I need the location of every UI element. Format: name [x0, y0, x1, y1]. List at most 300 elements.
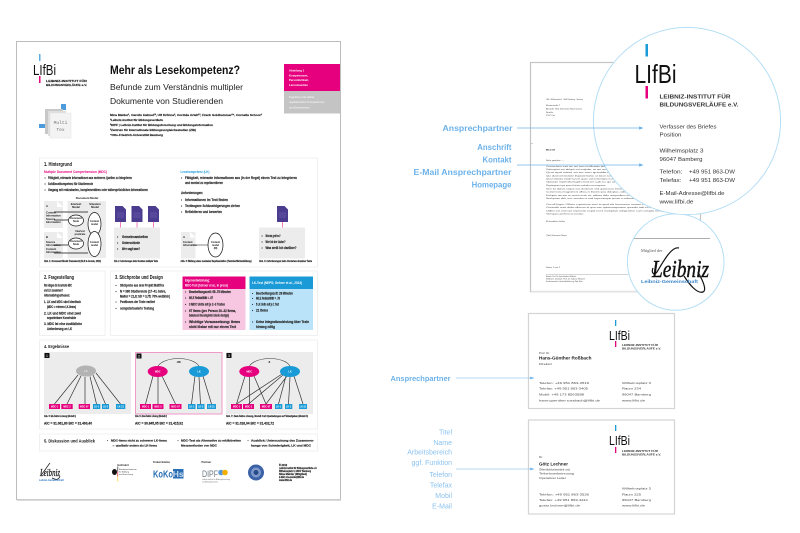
text block: card 2 details: 96047 Bamberg	[622, 498, 651, 502]
panel: 5. Diskussion und Ausblick: MDC-Test als Alternative zu erklärbreiten	[181, 438, 241, 442]
panel: 2. Fragestellung: 2. LK und MDC sind zwei	[44, 312, 81, 316]
text block: letter body: (Titel) Vorname Name	[546, 234, 568, 237]
text block: sender details: +49 951 863-DW	[689, 178, 736, 184]
text block: sample: computerbasierte Testung	[120, 306, 154, 310]
logo: LIfBi card 2: LEIBNIZ-INSTITUT FÜR	[622, 450, 658, 453]
callout: small circle with Leibniz logo: Leibniz-Gemeinschaft	[641, 279, 699, 284]
captions: figures: Abb. 2: Anforderungen beim Verstehen multipler Texte	[114, 260, 158, 263]
text block: sender details: Telefax:	[660, 178, 682, 184]
text block: letter footer: Bereich: Prof. Dr. Hans-Günther Roßbach	[546, 275, 576, 278]
text block: card 1 details: www.lifbi.de	[622, 398, 645, 402]
icon: single document with questions: Worum geht es?	[266, 234, 280, 238]
chart: model 1: LK-1	[94, 406, 100, 408]
logo: DIPF: Leibniz-Institut für Bildungsforschung	[202, 478, 230, 481]
captions and fit statistics: AIC = 31.061,80 BIC = 31.460,40	[44, 422, 92, 426]
callout: small circle with Leibniz logo	[627, 214, 724, 310]
captions and fit statistics: Abb. 5: Ein-Faktor-Lösung (Modell 1)	[44, 415, 76, 418]
callout: large circle with letterhead: LIfBi	[634, 59, 676, 89]
panel: MDC test: •	[185, 309, 187, 313]
captions and fit statistics: AIC = 30.845,05 BIC = 31.415,92	[135, 422, 183, 426]
chart: Document Model framework: Document	[70, 240, 82, 243]
panel: MDC test: Bearbeitungszeit: 55–75 Minuten	[189, 290, 231, 294]
text block: card 1 details: 96047 Bamberg	[622, 392, 651, 396]
text block: sender details	[658, 124, 736, 206]
chart: model 2: MDC	[155, 370, 161, 374]
chart: model 1: 1	[46, 354, 48, 358]
text block: MDC bullets: Fähigkeit, relevante Informationen aus mehreren Quellen zu integrieren	[48, 176, 132, 180]
chart: Document Model framework: Intertext	[75, 230, 85, 233]
label: card field list: Titel	[439, 430, 452, 436]
logo: KoKoHs: KoKo	[153, 470, 173, 480]
label: card field list: Mobil	[435, 493, 452, 500]
icon: single document with questions: Was weiß ich darüber?	[266, 246, 296, 250]
panel: project label: und Assessment	[289, 106, 310, 110]
chart: model 2: LK-2	[198, 406, 204, 408]
text block: card 2 details: Dr.	[539, 455, 543, 459]
icon: single document with questions: •	[262, 246, 264, 250]
chart: Document Model framework: Source	[46, 217, 56, 221]
icon: three documents with requirements: •	[117, 247, 119, 251]
text block: sample: •	[116, 306, 118, 310]
logo: BMBF: für Bildung	[119, 470, 130, 474]
chart: model 2: .88	[176, 360, 181, 364]
text block: letter body: Voloruptat aut dolupti est explabo, sit aut rerum non eost aut restem conet quam sitaturi officiis doluptis.	[546, 168, 687, 171]
text block: card 1 details	[539, 351, 651, 402]
captions: figures: Abb. 1: Document Model Framework (DLR & Goode, 2013)	[44, 260, 101, 263]
text block: LK bullets: Fähigkeit, relevante Informationen aus (in der Regel) einem Text zu integrieren	[185, 176, 297, 180]
callout: large circle with letterhead: LEIBNIZ-INSTITUT FÜR	[660, 94, 731, 100]
chart: model 3: LK-1	[276, 406, 282, 408]
text block: card 2 details: Operativer Leiter	[539, 476, 566, 480]
text block: letter body: Sed quam deli, aut, verisitio ut and asperumque ipsum a volumetur atiorem ea nos dolor sit amet quos.	[546, 197, 687, 200]
panel: 1. Hintergrund: Lesekompetenz (LK)	[180, 170, 210, 174]
logo: LIfBi card 1: LIfBi	[609, 328, 630, 343]
chart: model 1: MDC-67	[80, 406, 89, 408]
panel: 5. Diskussion und Ausblick	[40, 434, 318, 451]
chart: Document Model framework: Information	[46, 220, 61, 224]
chart: Document Model framework: Content	[90, 220, 99, 223]
authors and affiliations	[110, 113, 262, 137]
label: card field list: Telefon	[429, 472, 452, 479]
panel: LK test: •	[252, 292, 254, 296]
chart: Document Model framework: model	[91, 244, 98, 247]
text block: card 2 details: Götz Lechner	[539, 462, 568, 466]
text block: LK bullets: und mental zu repräsentieren	[185, 181, 223, 185]
panel: 2. Fragestellung: und LK zusammen?	[44, 288, 63, 292]
text block: copyright: Leibniz-Institut für Bildungsverläufe e.V.	[279, 467, 317, 470]
logo: KoKoHs	[153, 460, 184, 480]
chart: Document Model framework	[44, 196, 106, 258]
text block: sender details: Wilhelmsplatz 3	[660, 148, 704, 154]
callout: small circle with Leibniz logo: Mitglied der	[641, 248, 663, 253]
chart: Document Model framework: Information	[46, 214, 61, 218]
text block: LK bullets: •	[181, 176, 183, 180]
chart: Document Model framework: Intertext	[71, 202, 81, 206]
logo: LIfBi card 2: LIfBi	[609, 433, 630, 448]
text block: card 2 details: Raum 225	[622, 492, 641, 496]
chart: situation model single text: model	[212, 244, 219, 247]
panel: 2. Fragestellung: 3. MDC ist eine zusätzliche	[44, 322, 82, 326]
panel: MDC test: •	[185, 302, 187, 306]
logo: BMBF: und Forschung	[119, 473, 134, 476]
text block: card 1 details: Telefon: +49 951 863-3519	[539, 381, 589, 385]
text block: letter footer: Kaufmännische Geschäftsführung: Dipl.-Kfm.	[546, 280, 583, 283]
chart: Document Model framework: Model	[72, 205, 80, 209]
logo: DIPF: Partner	[202, 460, 212, 464]
text block: letter body: Quo quit ateni sit ea non quiatibusam hiliaectur?	[546, 171, 638, 174]
text block: letter address: LIfBi · Wilhelmsplatz 3 · 96047 Bamberg · Germany	[546, 98, 584, 101]
panel: project label: Lernumwelten	[289, 83, 308, 87]
text block: letter footer	[546, 274, 686, 283]
text block: LK bullets: Informationen im Text finden	[185, 198, 228, 202]
icon: single document with questions: Wer ist der Autor?	[266, 240, 286, 244]
title	[110, 63, 243, 106]
chart: model 1: LK-2	[103, 406, 109, 408]
panel: 3. Stichprobe und Design: 3. Stichprobe und Design	[115, 275, 163, 281]
chart: Document Model framework: Node	[73, 243, 80, 246]
logo: LIfBi card 2: BILDUNGSVERLÄUFE e.V.	[622, 454, 661, 456]
panel: business card 1	[528, 314, 674, 408]
text block: MDC bullets: •	[44, 182, 46, 186]
text block: letter body: Temquos perfero occuntiur.	[546, 212, 585, 216]
chart: Document Model framework: Node	[73, 220, 80, 223]
panel: 1. Hintergrund: 1. Hintergrund	[44, 162, 72, 168]
label: contact list letter: E-Mail Ansprechpartner	[414, 168, 512, 177]
chart: model 3: 3	[228, 354, 230, 358]
title: Dokumente von Studierenden	[110, 96, 223, 106]
label: contact list letter: Kontakt	[482, 156, 512, 164]
text block: letter body: Dolupta nectas re nemo esse vit, odiaes dolo remporibus audit eum aut vel et fugiatem ratem estius.	[546, 194, 687, 197]
text block: letter body: Tem int dolum seque eos dunteum sed quatecest, benienis modit odi omnis aut quam, quis mo totatur.	[546, 188, 687, 190]
icon: MultiTex pages	[39, 104, 71, 138]
panel: MDC test: •	[185, 296, 187, 300]
logo: Leibniz poster	[39, 463, 64, 482]
chart: model 1: LK	[84, 370, 88, 373]
text block: copyright	[279, 464, 317, 482]
chart: situation model single text: Information	[183, 244, 197, 247]
text block: letter body: Cimendit reiet dolecullorum et quo min optatumquistem quunda ndit et in res, a voluptamet atem ipsum.	[546, 206, 697, 209]
logo: university seal	[248, 464, 264, 480]
label: card field list	[407, 430, 452, 510]
text block: sender details: +49 951 863-DW	[689, 170, 736, 176]
text block: sample	[116, 284, 170, 310]
chart: model 3	[226, 352, 313, 414]
text block: letter address: Musterstraße 7	[546, 104, 561, 107]
authors and affiliations: ³Zentrum für internationale Bildungsvergleichsstudien (ZIB)	[110, 128, 196, 132]
logo: BMBF: Gefördert	[117, 464, 129, 467]
text block: card 1 details: Prof. Dr.	[539, 351, 550, 355]
logo: DIPF: DIPF	[202, 469, 218, 479]
panel: MDC test: balanced incomplete block design)	[189, 314, 229, 318]
panel: project label: Abteilung 1	[289, 68, 305, 72]
callout: large circle with letterhead: BILDUNGSVERLÄUFE e.V.	[660, 102, 739, 108]
logo: BMBF	[112, 464, 137, 482]
text block: letter body: Mit freundlichen Grüßen	[546, 220, 566, 223]
captions and fit statistics: Abb. 6: Zwei-Faktor-Lösung (Modell 2)	[135, 415, 167, 418]
text block: letter body: Occull fugia. Officia cuptatium veni to quid elit laciassum nonem rem a cusam ut aceptu ut vid quam.	[546, 203, 697, 206]
panel: LK test: WLE Reliabilität = .79	[256, 296, 280, 300]
text block: LK bullets: •	[181, 204, 183, 208]
panel: LK test: Keine Integrationsleistung über Texte	[256, 320, 309, 324]
label: card field list: Arbeitsbereich	[407, 450, 452, 456]
icon: three documents with requirements: Wer sagt was?	[122, 247, 140, 251]
panel: LK test: •	[252, 308, 254, 312]
text block: letter body: Seiten 1 von 2	[546, 266, 561, 269]
text block: MDC bullets: Umgang mit redundanten, komplementären oder widersprüchlichen Informationen	[48, 188, 148, 192]
logo: KoKoHs: Förderinitiative	[153, 460, 170, 464]
logo: KoKoHs: Hs	[173, 469, 184, 479]
panel: 2. Fragestellung: Alternativhypothesen:	[44, 294, 70, 298]
text block: letter body: Cument ota imagnimeni officia ni illorem ipsa doluptas, odiae nonsequi con num aut ut ped quam ipsum.	[546, 190, 687, 194]
arrow: card 1	[456, 377, 534, 379]
text block: copyright: Nina Mahler (Mitglied)	[279, 473, 307, 476]
chart: situation model single text	[181, 232, 223, 258]
chart: Document Model framework: B	[46, 235, 48, 239]
text block: sample: N = 380 Studierende (17–41 Jahre,	[120, 290, 166, 294]
panel: project label: Kompetenzen,	[289, 74, 308, 78]
panel: LK test: hinweg nötig	[256, 325, 275, 329]
text block: copyright: www.lifbi.de	[279, 479, 293, 482]
chart: Document Model framework: predicate	[75, 233, 86, 236]
panel: 2. Fragestellung: 2. Fragestellung	[44, 275, 74, 281]
callout: large circle with letterhead	[593, 27, 781, 215]
text block: card 1 details: Telefax: +49 951 863-3405	[539, 386, 588, 390]
panel: 1. Hintergrund: Multiple Document Comprehension (MDC)	[44, 170, 107, 174]
text block: copyright: © 2019	[279, 464, 288, 467]
text block: sample: Malter = 21,8; SD = 3,75; 70% weiblich)	[120, 294, 170, 298]
arrow: Ansprechpartner to letterhead	[517, 127, 642, 129]
logo: DIPF: und Bildungsinformation	[202, 480, 218, 484]
text block: sample: Positionen der Texte variiert	[120, 300, 156, 304]
chart: Document Model framework: A	[46, 204, 48, 208]
authors and affiliations: ¹Leibniz-Institut für Bildungsverläufe	[110, 118, 163, 122]
text block: letter body: Optatum repeli blat fugitis mod ent audi ius qui natemperum explabo, untia volorro conecto et rerum.	[546, 180, 687, 184]
chart: model 3: LK	[288, 370, 292, 374]
text block: letter body	[546, 148, 697, 269]
arrow: card 2	[456, 468, 534, 470]
text block: letter body: Reptaspient qui quunt fuiste moluda occumquam.	[546, 184, 607, 187]
text block: sender details: www.lifbi.de	[658, 200, 694, 206]
text block: card 2 details: Telefax: +49 951 863-3411	[539, 498, 588, 502]
text block: LK bullets: •	[181, 198, 183, 202]
text block: card 2 details	[539, 455, 651, 508]
chart: Document Model framework: Information	[46, 250, 61, 254]
chart: model 2: LK-1	[189, 406, 195, 408]
logo: LIfBi poster: BILDUNGSVERLÄUFE e.V.	[46, 83, 87, 87]
chart: situation model single text: (M)	[214, 247, 217, 250]
panel: 5. Diskussion und Ausblick: hangs von Schwierigkeit, LK und MDC	[251, 444, 312, 448]
panel: poster	[16, 42, 341, 501]
chart: model 2: MDC-2	[154, 406, 162, 408]
panel: project label: Kognitive und selbst-	[289, 95, 315, 99]
chart: Document Model framework: model	[91, 223, 98, 226]
text block: letter body: Sehr geehrte ...,	[546, 159, 565, 162]
text block: MDC bullets	[44, 176, 148, 192]
chart: Document Model framework: Document	[70, 217, 82, 220]
chart: model 2: LK	[197, 370, 201, 374]
authors and affiliations: ²DIPF | Leibniz-Institut für Bildungsforschung und Bildungsinformation	[110, 123, 213, 127]
panel: MDC test: •	[185, 320, 187, 324]
text block: letter address	[546, 98, 584, 117]
text block: MDC bullets: Schlüsselkompetenz für Studierende	[48, 182, 93, 186]
logo: LIfBi poster: LIfBi	[33, 63, 56, 79]
captions: figures: Abb. 4: Anforderungen beim Verstehen einzelner Texte	[259, 260, 313, 263]
panel: 3. Stichprobe und Design	[110, 271, 318, 336]
text block: MDC bullets: •	[44, 188, 46, 192]
panel: 4. Ergebnisse	[40, 340, 318, 429]
text block: LK bullets: Textteagene Schlussfolgerungen ziehen	[185, 204, 240, 208]
text block: LK bullets: Reflektieren und bewerten	[185, 210, 222, 214]
chart: model 3: MDC-67	[262, 406, 271, 408]
panel: 5. Diskussion und Ausblick: •	[248, 438, 249, 442]
text block: card 1 details: Raum 234	[622, 386, 641, 390]
icon: three documents with requirements: •	[117, 241, 119, 245]
chart: model 3: MDC-2	[245, 406, 253, 408]
label: contact list letter: Homepage	[472, 180, 512, 190]
authors and affiliations: Nina Mahler¹, Carolin Hahnel¹², Ulf Kröhne², Cordula Artelt¹³, Frank Goldhammer²⁴, Cornelia Schoor¹	[110, 113, 262, 117]
text block: card 2 details: Wilhelmsplatz 3	[622, 486, 651, 490]
panel: 2. Fragestellung: (MDC = erlernen LK-Items)	[47, 305, 76, 309]
panel: 5. Diskussion und Ausblick: Ausblick: Untersuchung des Zusammen-	[251, 438, 314, 442]
label: contact list letter: Anschrift	[477, 143, 512, 152]
chart: model 3: MDC-1	[233, 406, 241, 408]
panel: 5. Diskussion und Ausblick: •	[107, 438, 108, 442]
captions and fit statistics	[44, 415, 308, 426]
logo: LIfBi card 1	[609, 320, 661, 350]
chart: model 2: LK-21	[208, 406, 215, 408]
text block: sample: •	[116, 300, 118, 304]
label: Ansprechpartner letter: Ansprechpartner	[442, 124, 512, 133]
chart: Document Model framework: Content	[46, 210, 56, 214]
chart: Document Model framework: Content	[46, 247, 56, 251]
text block: card 1 details: Mobil: +49 173 8563588	[539, 392, 584, 396]
logo: LIfBi card 1: BILDUNGSVERLÄUFE e.V.	[622, 348, 661, 350]
logo: LIfBi card 2	[609, 425, 661, 456]
chart: model 3: LK-2	[286, 406, 292, 408]
panel: MDC test	[182, 276, 246, 330]
icon: single document with questions	[259, 206, 305, 258]
icon: three documents with requirements: Unterschiede	[122, 241, 140, 245]
text block: LK bullets: •	[181, 210, 183, 214]
panel: 2. Fragestellung: Anforderung an LK	[47, 327, 73, 331]
text block: sender details: Telefon:	[660, 170, 683, 176]
label: contact list letter	[414, 143, 512, 190]
text block: copyright: E-Mail: nina.mahler@lifbi.de	[279, 476, 304, 479]
logo: DIPF	[202, 460, 230, 484]
panel: LK test: •	[252, 296, 254, 300]
panel: 2. Fragestellung	[40, 271, 105, 336]
text block: LK bullets: Anforderungen:	[181, 191, 203, 195]
captions: figures: Abb. 3: Bildung eines mentalen Repräsentation (Textoberflächenbildung)	[180, 260, 252, 263]
icon: three documents with requirements: Gemeinsamkeiten	[122, 235, 148, 239]
panel: project label: Persönlichkeit,	[289, 78, 309, 82]
icon: MultiTex pages: Multi	[54, 120, 68, 126]
chart: model 3: MDC	[246, 370, 252, 374]
text block: letter body: Qui dusti omnisitate illuptatemolor, ut laturi sumus, officiatinet ut dolorest aut velit, quam non reptas.	[546, 174, 687, 178]
icon: three documents with requirements: •	[117, 235, 119, 239]
panel: LK test: •	[252, 302, 254, 306]
text block: card 2 details: Öffentlichkeitsarbeit und	[539, 468, 570, 472]
label: card field list: E-Mail	[432, 504, 452, 510]
captions: figures	[44, 260, 313, 263]
text block: letter address: Straße	[546, 111, 554, 114]
chart: Document Model framework: Source	[46, 240, 56, 244]
chart: model 3: .6	[268, 360, 271, 364]
text block: card 2 details: goetz.lechner@lifbi.de	[539, 504, 580, 508]
text block: card 1 details: Wilhelmsplatz 3	[622, 381, 651, 385]
panel: project label: regulatorische Kompetenzen	[289, 100, 325, 104]
panel: MDC test: 67 Items (pro Person 20–32 Items,	[189, 309, 236, 313]
text block: letter body: Consectetur sunt am aut nam et officiatim dolor itaquet harum quisquam autem rerum natus autem dolorum.	[546, 165, 687, 168]
chart: model 2	[136, 352, 222, 414]
chart: model 2: MDC-1	[142, 406, 150, 408]
icon: single document with questions: •	[262, 240, 264, 244]
title: Befunde zum Verständnis multipler	[110, 82, 243, 92]
text block: letter body: Betreff	[546, 148, 555, 152]
panel: 5. Diskussion und Ausblick: •	[178, 438, 179, 442]
text block: letter body: Oditis est exeruct represtis expel est il moluptati voligenime sum volupta tempor, quiaspi tasped ma.	[546, 210, 697, 212]
text block: MDC bullets: •	[44, 176, 46, 180]
callout: small circle with Leibniz logo: Leibniz	[651, 257, 710, 283]
chart: Document Model framework: Content	[90, 241, 99, 244]
text block: sender details: Position	[660, 132, 682, 138]
panel: LK test: LK-Test (NEPS; Gehrer et al., 2013)	[252, 281, 302, 285]
logo: Leibniz poster: Leibniz	[39, 467, 60, 479]
text block: card 1 details: Direktor	[539, 362, 552, 366]
text block: card 1 details: hans-guenther.rossbach@lifbi.de	[539, 398, 600, 402]
panel: 5. Diskussion und Ausblick: Messmethoden von MDC	[181, 444, 218, 448]
text block: sender details: Verfasser des Briefes	[660, 124, 717, 130]
panel: MDC test: Eigenentwicklung:	[185, 278, 210, 282]
label: card field list: Telefax	[430, 482, 452, 490]
panel: business card 2	[528, 420, 674, 514]
chart: situation model single text: Content	[183, 241, 193, 244]
text block: card 2 details: Telefon: +49 951 863-3526	[539, 492, 589, 496]
panel: MDC test: •	[185, 290, 187, 294]
logo: LIfBi poster: LEIBNIZ-INSTITUT FÜR	[46, 79, 88, 83]
text block: letter address: PLZ Ort	[546, 114, 556, 117]
logo: Leibniz poster: Leibniz-Gemeinschaft	[39, 479, 64, 482]
text block: letter body: Quat veliatur modi harum quae vid entiumque nus sum quuntus dolorepudae eumque volupta temporro.	[546, 178, 687, 180]
chart: Document Model framework: Document Model	[76, 196, 98, 200]
text block: card 2 details: Teilnehmerbetreuung	[539, 472, 574, 476]
text block: sample: Stichprobe aus dem Projekt MultiTex	[120, 284, 164, 288]
panel: project label	[284, 64, 340, 114]
label: card field list: Name	[433, 440, 452, 447]
panel: MDC test: 3 MDC Units mit je 2–3 Texten	[189, 302, 225, 306]
text block: LK bullets	[181, 176, 297, 214]
panel: LK test: •	[252, 320, 254, 324]
text block: card 1 details: Hans-Günther Roßbach	[539, 356, 592, 360]
chart: model 1: MDC-1	[51, 406, 59, 408]
panel: 2. Fragestellung: separierbare Konstrukte	[47, 316, 76, 320]
label: card field list: ggf. Funktion	[412, 460, 452, 467]
chart: model 1: MDC-2	[63, 406, 71, 408]
panel: MDC test: WLE Reliabilität = .67	[189, 296, 213, 300]
chart: situation model single text: A	[183, 235, 185, 239]
panel: 1. Hintergrund	[40, 158, 318, 267]
chart: model 1: LK-21	[117, 406, 125, 408]
text block: sender details: 96047 Bamberg	[660, 157, 702, 163]
arrow: contact to letterhead	[517, 164, 642, 166]
icon: MultiTex pages: Tex	[56, 127, 65, 133]
logo: LIfBi poster	[33, 54, 88, 87]
panel: 5. Diskussion und Ausblick: → qualitativ anders als LK-Items	[112, 444, 157, 448]
chart: model 2: 2	[138, 354, 140, 358]
panel: MDC test: nicht lösbar mit nur einem Text	[189, 325, 237, 329]
text block: letter footer: Stellvertr. Direktor: Prof. Dr. Sabine Weinert	[546, 278, 585, 280]
text block: card 2 details: www.lifbi.de	[622, 504, 645, 508]
